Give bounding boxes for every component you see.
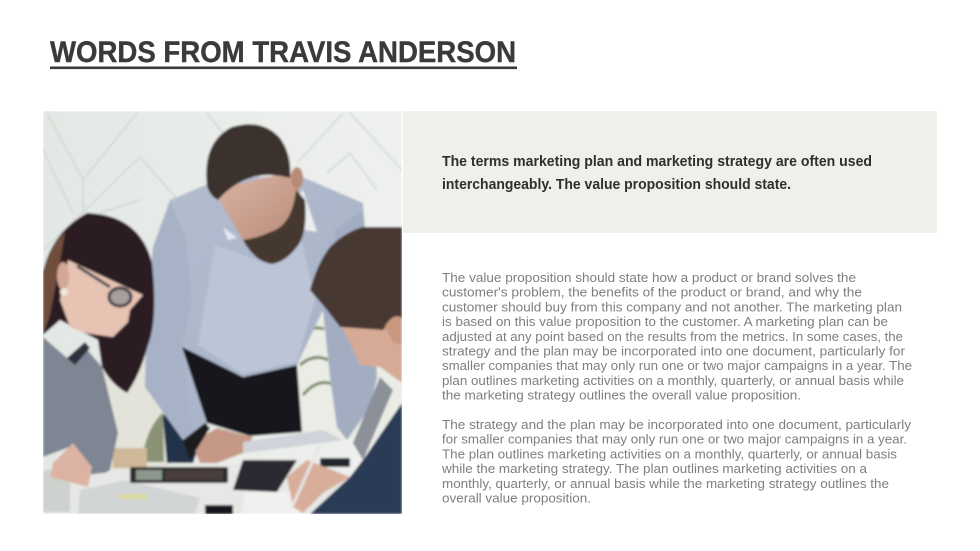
body paragraph 1 [442, 270, 912, 403]
right man: head [310, 227, 402, 383]
body paragraph 1: strategy and the plan may be incorporated into one document, particularly for [442, 344, 906, 358]
quote text: interchangeably. The value proposition should state. [442, 177, 791, 193]
centre man: head [206, 124, 306, 264]
body paragraph 2: The plan outlines marketing activities on a monthly, quarterly, or annual basis [442, 446, 897, 461]
body paragraph 2: while the marketing strategy. The plan outlines marketing activities on a [441, 461, 868, 476]
body paragraph 1: adjusted at any point based on the results from the metrics. In some cases, the [442, 329, 903, 344]
right man: suit [310, 403, 402, 514]
quote panel [403, 111, 937, 233]
body paragraph 1: smaller companies that may only run one or two major campaigns in a year. The [442, 358, 912, 373]
left woman: shirt [43, 337, 118, 480]
centre man: cuff and hand [183, 423, 253, 463]
photo: team of three reviewing documents at a table [43, 111, 402, 514]
table [43, 442, 200, 514]
body paragraph 1: the marketing strategy outlines the overall value proposition. [442, 388, 801, 403]
centre man: shirt [145, 176, 377, 440]
quote text: The terms marketing plan and marketing strategy are often used [442, 154, 872, 170]
wall chevrons [43, 113, 402, 250]
body paragraph 1: is based on this value proposition to the customer. A marketing plan can be [442, 314, 888, 329]
body paragraph 1: customer should buy from this company and not another. The marketing plan [442, 299, 902, 314]
body paragraph 2: The strategy and the plan may be incorporated into one document, particularly [442, 417, 912, 432]
body paragraph 2 [441, 417, 912, 506]
left woman: hair and face [43, 213, 154, 393]
centre man: trousers [163, 345, 302, 463]
body paragraph 2: for smaller companies that may only run one or two major campaigns in a year. [442, 432, 907, 447]
laptop [353, 377, 393, 460]
body paragraph 1: customer's problem, the benefits of the product or brand, and why the [442, 285, 862, 300]
body paragraph 2: overall value proposition. [442, 490, 591, 506]
body paragraph 1: The value proposition should state how a product or brand solves the [442, 270, 856, 285]
quote text [442, 154, 872, 193]
title: WORDS FROM TRAVIS ANDERSON [50, 36, 516, 69]
body paragraph 2: monthly, quarterly, or annual basis while the marketing strategy outlines the [442, 476, 889, 491]
notebook and papers [205, 430, 350, 514]
body paragraph 1: plan outlines marketing activities on a monthly, quarterly, or annual basis while [442, 373, 904, 388]
lower background with plant [104, 324, 401, 470]
right man: writing hand and pen [286, 459, 350, 514]
tablet [130, 467, 228, 483]
